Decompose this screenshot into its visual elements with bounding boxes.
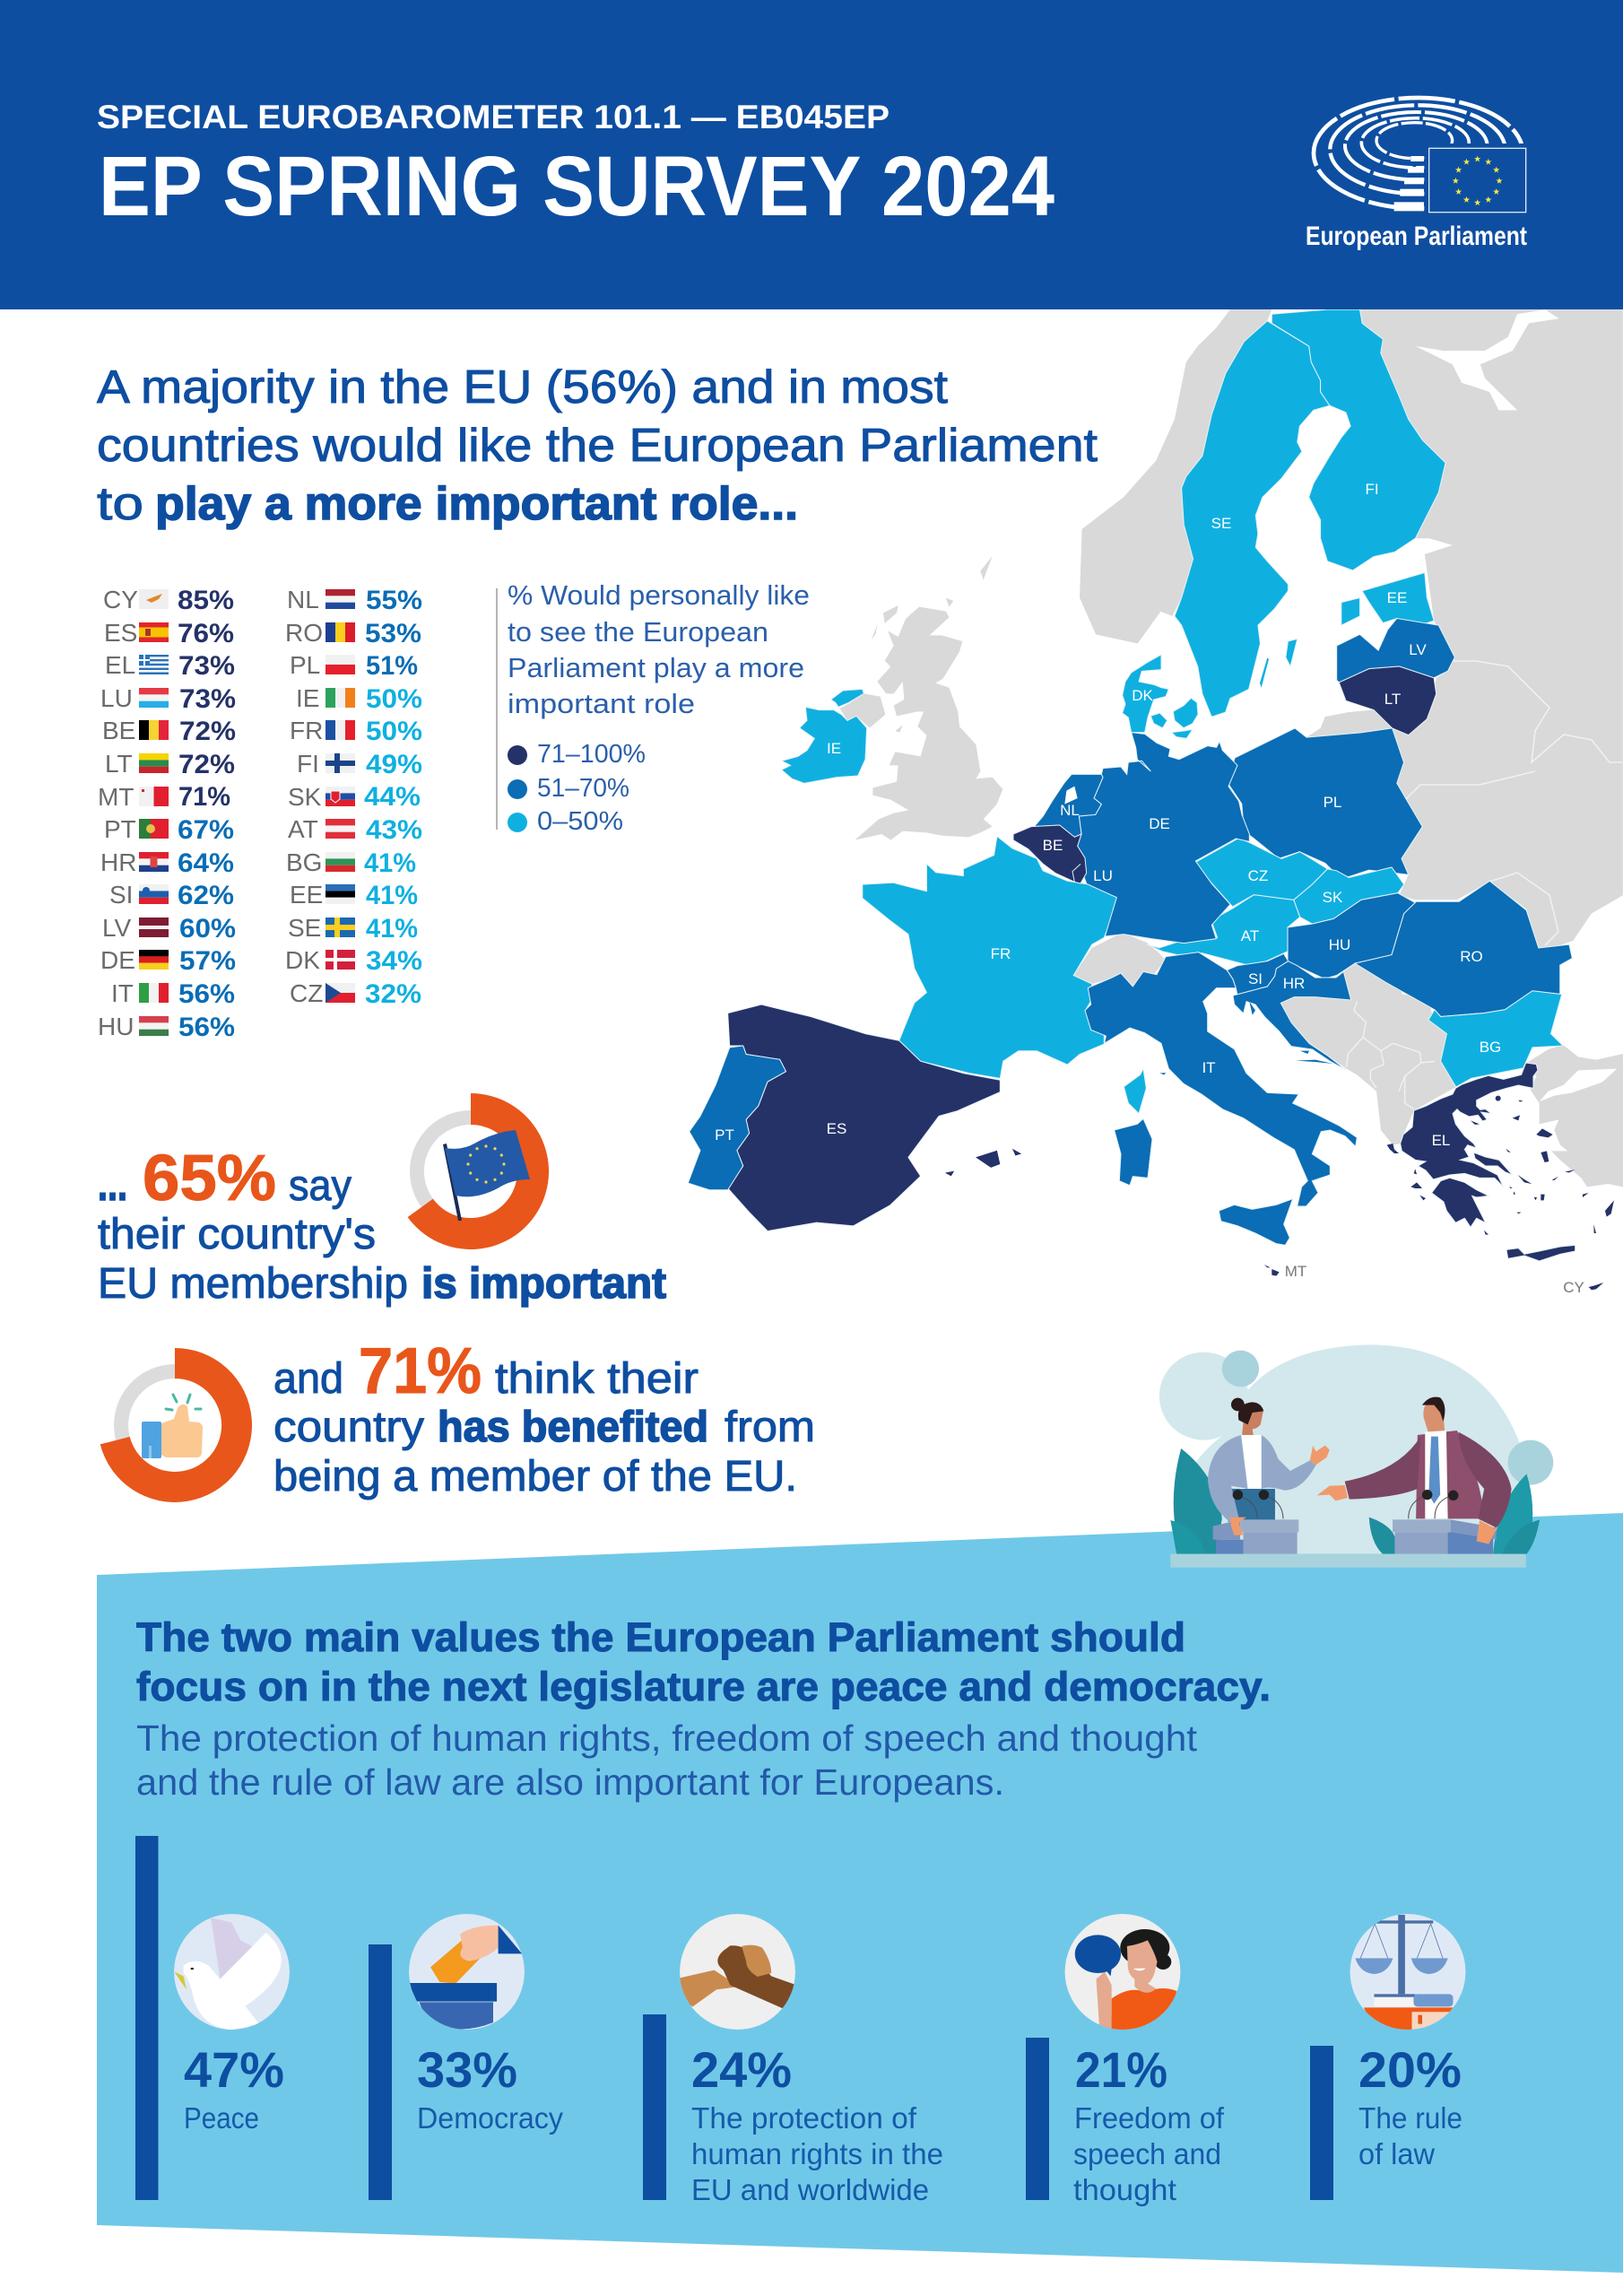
statement: 65%: is important [421,1260,666,1308]
map legend: % Would personally like [508,579,810,611]
statement: 65%: say [289,1162,352,1210]
northern countries [1175,309,1454,877]
row IT 56% [111,979,235,1009]
map country labels: DK [1132,687,1153,704]
country: Malta [1264,1265,1280,1276]
main heading: play a more important role... [155,478,798,530]
map country labels: FI [1365,481,1379,498]
country: Crete [1506,1245,1575,1261]
map country labels: DE [1149,815,1170,832]
icon: person with speech bubble [1065,1914,1180,2030]
bay: IJsselmeer [1064,787,1078,804]
country: Sardinia [1115,1118,1152,1186]
map country labels: HR [1283,975,1305,992]
illustration: politicians debating [1159,1344,1553,1568]
Greece and Cyprus [1387,1063,1614,1290]
row HU 56%: HU [98,1013,134,1040]
leaves [1170,1448,1540,1554]
country: Lolland [1172,729,1193,738]
country: Zealand [1173,698,1198,728]
country: Romania [1355,881,1572,1016]
map country labels: PL [1324,794,1341,811]
microphones [1233,1490,1458,1518]
right podium [1393,1519,1497,1554]
icon: thumbs up [142,1395,203,1458]
map country labels: IT [1202,1059,1216,1076]
main heading [97,361,1098,530]
country: Slovenia [1227,953,1289,996]
row CZ 32% [290,979,421,1009]
row PT 67% [104,815,234,845]
row HR 64%: HR [100,848,136,876]
icon: scales of justice [1350,1914,1465,2030]
country: Slovakia [1294,867,1404,924]
row AT 43% [288,815,422,845]
country: Lithuania [1339,666,1436,735]
country: Oland [1260,657,1269,688]
row IT 56%: 56% [178,979,235,1009]
map country labels: PT [715,1126,734,1144]
country: Estonia [1362,572,1434,625]
map legend: Parliament play a more [508,652,804,683]
row FI 49%: 49% [366,750,422,779]
stat: democracy [417,2041,563,2135]
woman speaker [1208,1398,1330,1522]
country: Bulgaria [1428,991,1563,1087]
map legend: important role [508,688,695,719]
Germany, Benelux, Denmark [1013,655,1269,944]
row ES 76% [104,619,234,648]
bar: freedom of speech [1026,2038,1049,2200]
panel heading: The two main values the European Parliament should [136,1614,1185,1660]
row CY 85%: 85% [178,586,234,615]
row AT 43%: AT [288,815,318,843]
row BG 41% [286,848,416,878]
map country labels: MT [1285,1263,1306,1280]
row EE 41%: EE [290,881,323,909]
country: Belgium and Luxembourg [1013,825,1087,883]
header banner [0,0,1623,309]
main title: EP SPRING SURVEY 2024 [99,139,1055,234]
row NL 55%: 55% [366,586,422,615]
country: Jutland [1123,655,1168,733]
stat: freedom of speech: Freedom of [1074,2101,1225,2135]
southern and central countries [688,837,1572,1231]
icon: dove [174,1914,290,2030]
row RO 53%: 53% [365,619,421,648]
panel heading [136,1614,1271,1709]
stat: peace: 47% [184,2041,284,2098]
row NL 55%: NL [287,586,319,613]
country ranking table [98,586,422,1042]
row BE 72%: BE [102,717,135,744]
map country labels: RO [1460,948,1483,965]
row RO 53%: RO [285,619,323,647]
statement: 65% [98,1143,666,1308]
row SE 41%: SE [288,914,321,942]
statement: 71%: 71% [359,1335,482,1407]
row ES 76%: 76% [178,619,234,648]
map country labels: LV [1409,641,1427,658]
map country labels: AT [1241,927,1259,944]
row LT 72%: 72% [178,750,235,779]
map country labels: BG [1480,1039,1501,1056]
Italy, Slovenia, Croatia, islands [1085,952,1357,1276]
bar: democracy [369,1944,392,2200]
row MT 71%: 71% [178,782,230,812]
stat: freedom of speech: speech and [1073,2137,1221,2170]
backdrop shapes [1159,1344,1553,1554]
header kicker: SPECIAL EUROBAROMETER 101.1 — EB045EP [97,99,890,135]
map country labels: HU [1329,936,1350,953]
statement: 71%: being a member of the EU. [273,1453,797,1500]
man speaker [1317,1397,1512,1527]
row DK 34%: DK [285,946,320,974]
row DE 57%: DE [100,946,135,974]
stat: peace: Peace [184,2101,259,2135]
row HR 64%: 64% [178,848,234,878]
row BG 41%: 41% [364,848,416,878]
main heading: A majority in the EU (56%) and in most [97,361,949,413]
internal borders of non-EU countries [1347,661,1623,1109]
legend item 51-70%: 51–70% [537,774,629,803]
row AT 43%: 43% [366,815,422,845]
row EL 73%: EL [105,651,135,679]
row NL 55% [287,586,422,615]
row FI 49%: FI [297,750,319,778]
EU countries [688,309,1614,1290]
country: Greek islands [1387,1096,1614,1235]
row SE 41% [288,914,418,944]
row BE 72%: 72% [179,717,236,746]
country: Peloponnese [1432,1178,1488,1227]
row CY 85%: CY [103,586,138,613]
icon: handshake [678,1914,796,2030]
row SE 41%: 41% [366,914,418,944]
row LU 73%: 73% [179,684,236,714]
country: Germany [1078,733,1249,944]
row LU 73% [100,684,236,714]
stat: freedom of speech [1073,2041,1225,2206]
row HU 56% [98,1013,235,1042]
stat: human rights [691,2041,943,2206]
map country labels: CY [1563,1279,1584,1296]
statement: 71%: country [273,1404,424,1451]
row BE 72% [102,717,236,746]
statement: 65%: EU membership [98,1260,408,1308]
row DE 57%: 57% [179,946,236,976]
row MT 71% [98,782,230,812]
row LT 72%: LT [105,750,133,778]
map country labels: NL [1060,802,1080,819]
row RO 53% [285,619,421,648]
map country labels: CZ [1248,867,1268,884]
stat: democracy: 33% [417,2041,517,2098]
map country labels: SI [1248,970,1263,987]
row SI 62%: 62% [178,881,234,910]
panel subheading [136,1718,1198,1803]
country: Finland [1271,309,1445,570]
country: Funen [1150,713,1167,728]
stat: freedom of speech: 21% [1075,2041,1167,2098]
map country labels: FR [991,945,1011,962]
country: Poland [1228,728,1422,877]
map country labels: LT [1384,691,1401,708]
country: Netherlands [1034,774,1103,837]
row DK 34% [285,946,422,976]
map country labels: BE [1043,837,1063,854]
row EE 41% [290,881,418,910]
country: Cyprus [1589,1283,1603,1290]
panel heading: focus on in the next legislature are peace and democracy. [136,1664,1271,1709]
country: Balearic islands [945,1149,1021,1176]
row PT 67%: PT [104,815,136,843]
left podium [1213,1518,1298,1554]
row LT 72% [105,750,235,779]
country: Croatian islands [1159,1002,1333,1074]
row PL 51%: PL [290,651,320,679]
main heading: to [97,478,143,530]
map country labels [715,481,1584,1296]
row FR 50%: FR [290,717,323,744]
map country labels: EE [1387,589,1407,606]
statement: 65%: their country's [98,1211,376,1258]
stat: rule of law: 20% [1358,2041,1462,2098]
row LV 60%: 60% [179,914,236,944]
panel subheading: and the rule of law are also important for Europeans. [136,1761,1004,1803]
European Parliament logo [1306,98,1527,251]
country: Croatia [1233,961,1351,1070]
row HU 56%: 56% [178,1013,235,1042]
stat: democracy: Democracy [417,2101,563,2135]
row FI 49% [297,750,422,779]
country: Greece mainland [1401,1063,1538,1187]
stat: rule of law: of law [1358,2137,1435,2170]
country: Euboea [1473,1152,1513,1175]
country: Czechia [1196,838,1327,907]
row CZ 32%: 32% [365,979,421,1009]
statement: 71%: think their [495,1355,699,1403]
stat: human rights: human rights in the [691,2137,943,2170]
row DK 34%: 34% [366,946,422,976]
row SK 44% [288,782,421,812]
row HR 64% [100,848,234,878]
icon: ballot box [409,1914,525,2030]
map country labels: LU [1093,867,1113,884]
stat: human rights: 24% [691,2041,792,2098]
statement: 71%: and [273,1355,343,1403]
row MT 71%: MT [98,783,134,811]
row PL 51% [290,651,418,681]
country: Austria [1147,895,1300,967]
row EL 73%: 73% [178,651,235,681]
map country labels: SK [1323,889,1343,906]
row IE 50%: 50% [366,684,422,714]
country: France [863,837,1119,1078]
stat: human rights: The protection of [691,2101,917,2135]
row DE 57% [100,946,236,976]
stat: rule of law [1358,2041,1462,2170]
row EL 73% [105,651,235,681]
country: Hungary [1288,893,1416,978]
map country labels: SE [1211,515,1231,532]
country: Italy [1085,952,1357,1206]
stat: peace [184,2041,284,2135]
panel subheading: The protection of human rights, freedom of speech and thought [136,1718,1198,1759]
border line: Luxembourg [1072,864,1081,882]
non-EU countries in grey [840,309,1623,1187]
row FR 50% [290,717,422,746]
row IE 50% [296,684,422,714]
European Parliament logo: European Parliament [1306,222,1527,251]
statement: 71% [273,1335,815,1500]
country: Corsica [1124,1069,1146,1114]
row LV 60% [102,914,236,944]
panel: main values [97,1513,1623,2273]
row EE 41%: 41% [366,881,418,910]
platform [1170,1554,1526,1568]
country: Gotland [1286,639,1298,666]
row SK 44%: SK [288,783,322,811]
country: Sweden [1175,321,1330,717]
donut chart: 65% [408,1093,549,1249]
map legend: to see the European [508,616,768,648]
statement: 71%: from [725,1404,815,1451]
row SI 62% [109,881,234,910]
stat: freedom of speech: thought [1073,2173,1176,2206]
row LV 60%: LV [102,914,131,942]
row PL 51%: 51% [366,651,418,681]
row ES 76%: ES [104,619,137,647]
country: Estonian islands [1341,598,1359,625]
map legend [496,579,810,836]
stat: rule of law: The rule [1358,2101,1462,2135]
map country labels: EL [1432,1132,1450,1149]
bar: rule of law [1310,2046,1333,2200]
country: Sicily [1219,1199,1293,1245]
country: Latvia [1337,618,1454,683]
map of Europe [688,309,1623,1296]
bar: peace [135,1836,158,2200]
row LU 73%: LU [100,684,133,712]
row BG 41%: BG [286,848,322,876]
donut chart: 71% [100,1348,252,1502]
country: Portugal [688,1046,785,1190]
stat: human rights: EU and worldwide [691,2173,929,2206]
country: Spain [728,1004,1000,1231]
row SK 44%: 44% [364,782,421,812]
statement: 65%: ... [98,1159,127,1211]
legend item 0-50%: 0–50% [537,807,623,836]
statement: 71%: has benefited [438,1404,708,1451]
main heading: countries would like the European Parliament [97,420,1098,472]
row IT 56%: IT [111,979,134,1007]
map country labels: IE [827,740,841,757]
bar: human rights [643,2014,666,2200]
country: Ireland [782,689,867,783]
row CZ 32%: CZ [290,979,323,1007]
statement: 65%: 65% [143,1143,276,1214]
row PT 67%: 67% [178,815,234,845]
icon: EU flag [443,1130,530,1221]
map country labels: ES [827,1120,846,1137]
row SI 62%: SI [109,881,133,909]
row CY 85% [103,586,234,615]
legend item 71-100%: 71–100% [537,740,646,769]
row IE 50%: IE [296,684,319,712]
row FR 50%: 50% [366,717,422,746]
